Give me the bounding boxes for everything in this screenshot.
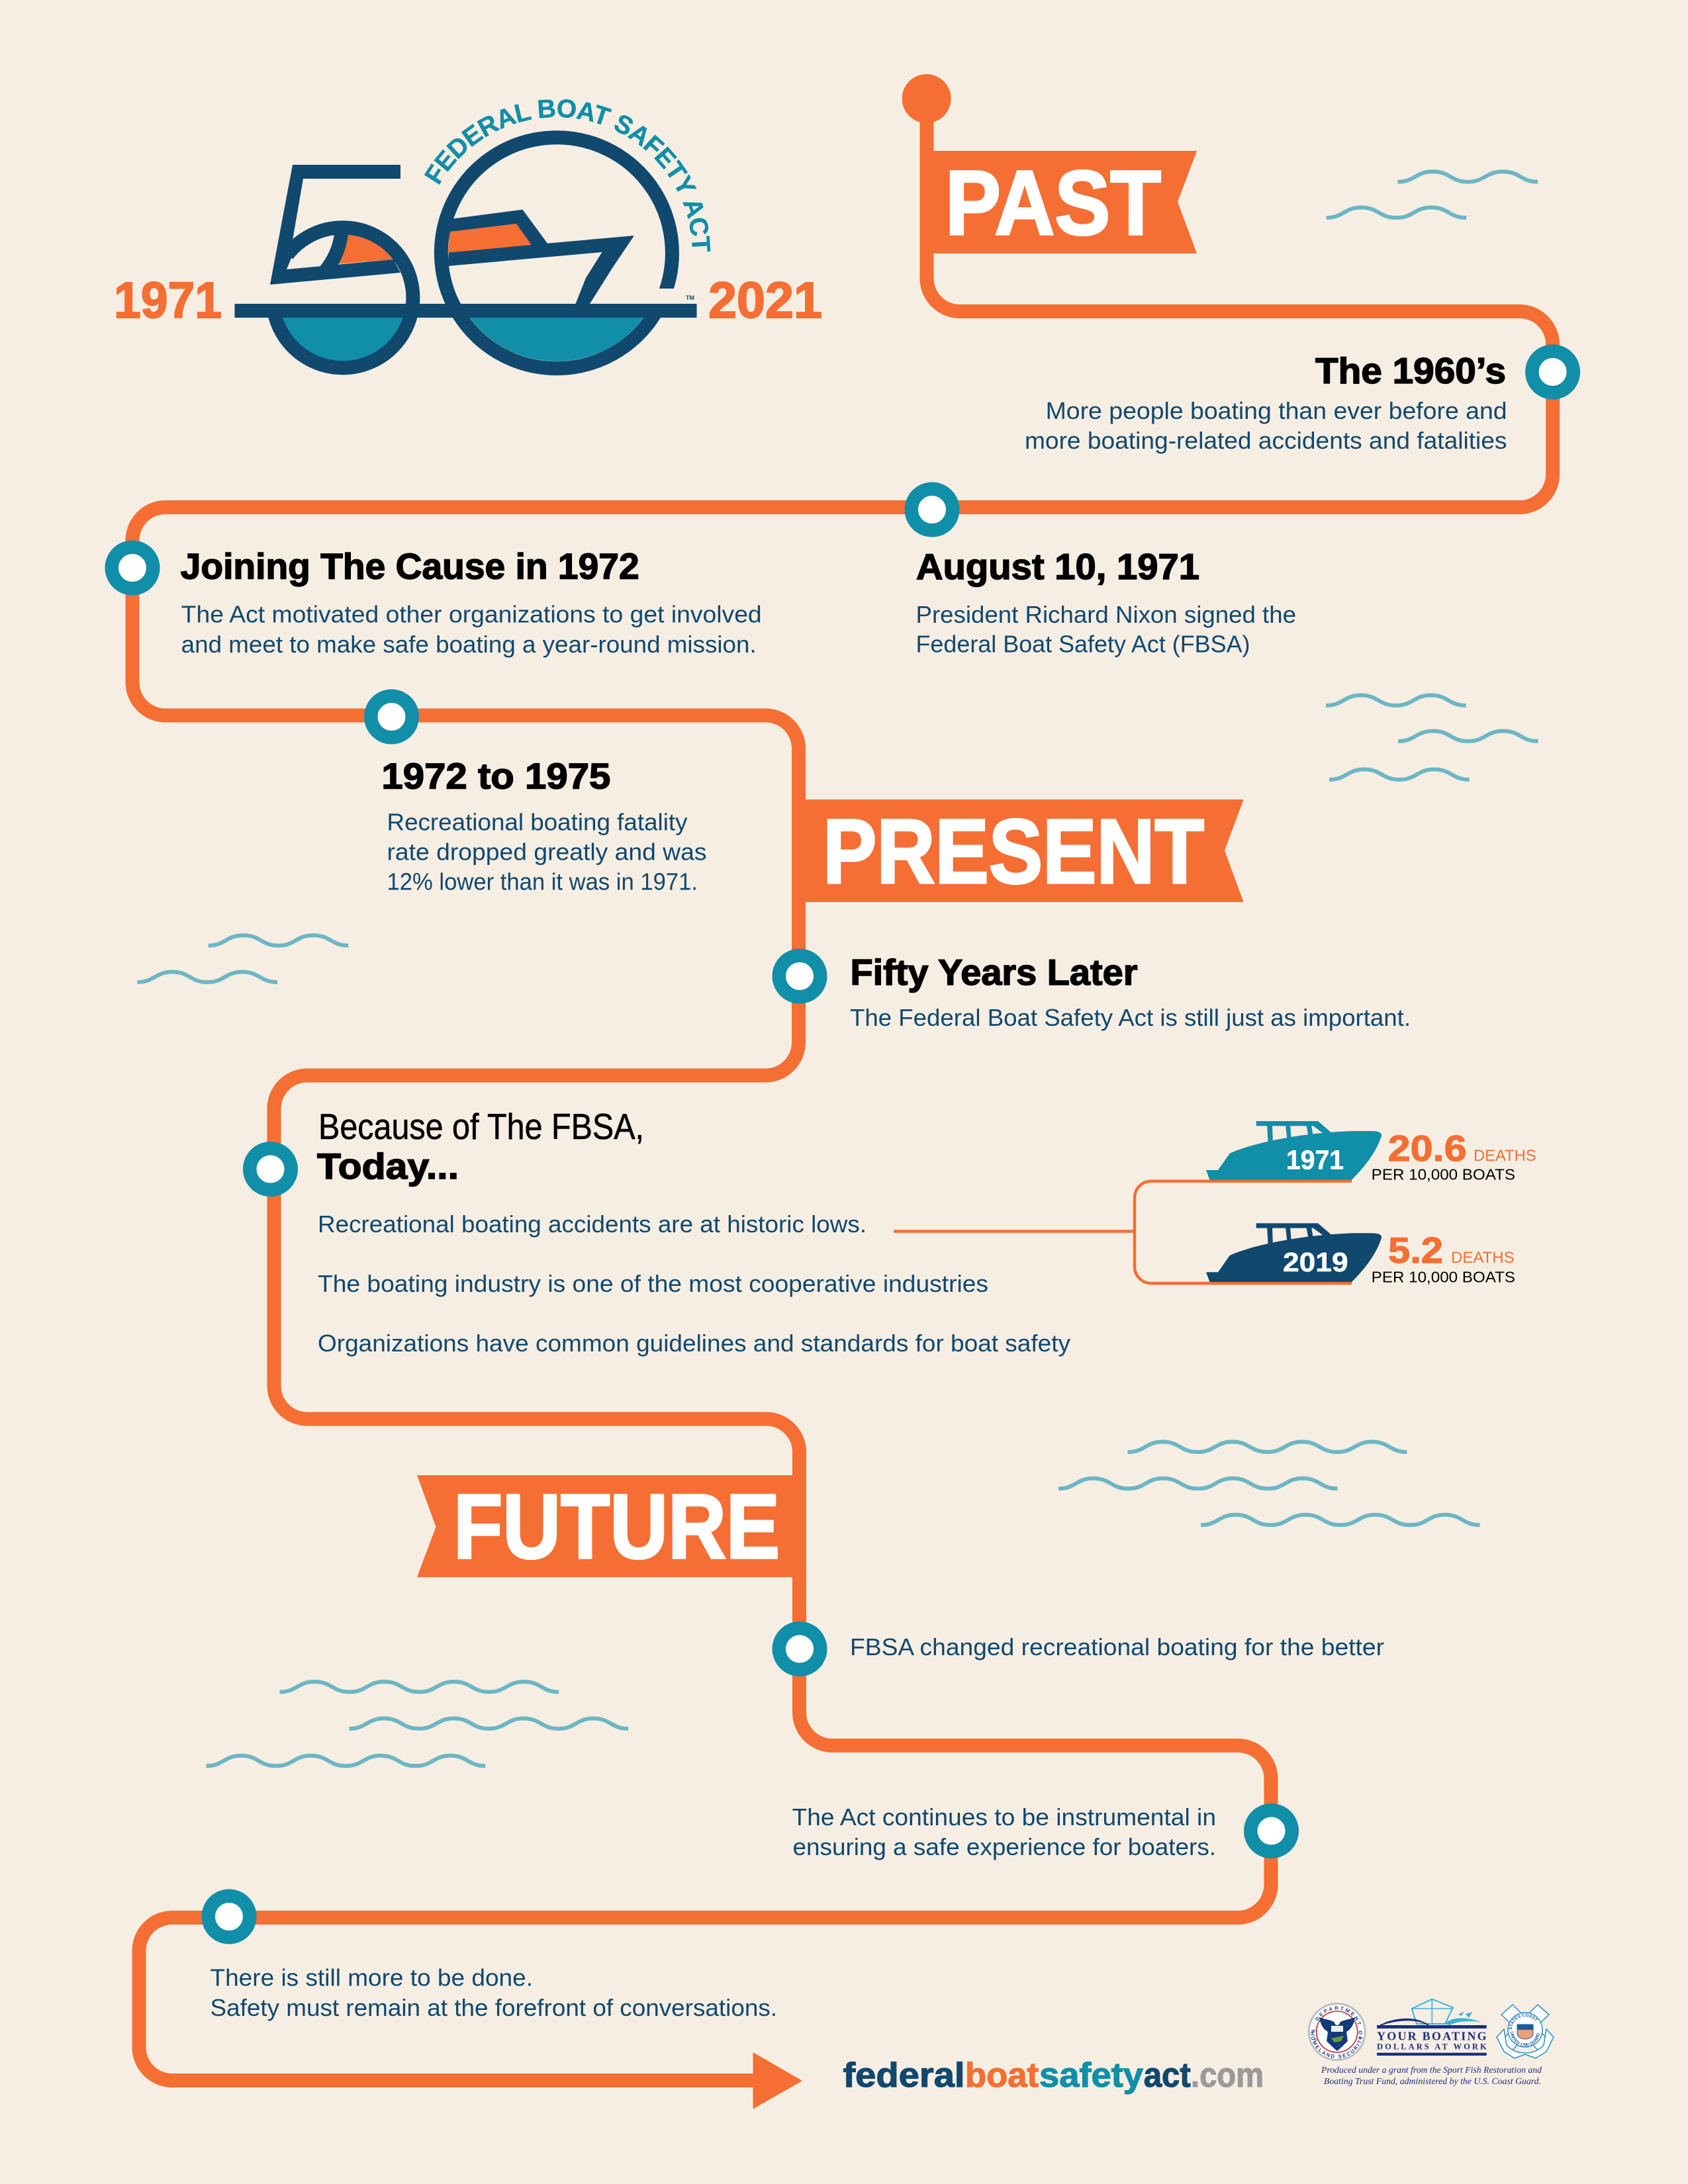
- website url: act: [1144, 2056, 1191, 2095]
- text block: Fifty Years Later: [850, 952, 1411, 1031]
- text block: August 10, 1971: Federal Boat Safety Act (FBSA): [916, 631, 1250, 658]
- text block: Fifty Years Later: The Federal Boat Safety Act is still just as important.: [850, 1004, 1411, 1031]
- text block: August 10, 1971: President Richard Nixon signed the: [916, 601, 1296, 628]
- text block: The Act continues: [792, 1803, 1216, 1860]
- text block: Because of The FBSA, Today: Organizations have common guidelines and standards for boat safety: [318, 1330, 1070, 1357]
- text block: Because of The FBSA, Today: [317, 1106, 1070, 1357]
- stat: 2019 boat: DEATHS: [1451, 1249, 1515, 1267]
- route line: [132, 99, 1553, 2081]
- logo start year: 1971: [114, 272, 222, 329]
- icon: Your Boating Dollars At Work logo: DOLLARS AT WORK: [1377, 2042, 1487, 2052]
- website url: [843, 2056, 1264, 2095]
- text block: Fifty Years Later: Fifty Years Later: [850, 952, 1137, 993]
- text block: Joining The Cause in 1972: Joining The Cause in 1972: [181, 545, 639, 586]
- text block: 1972 to 1975: Recreational boating fatality: [387, 809, 687, 835]
- logo: Federal Boat Safety Act 50 years: [114, 99, 822, 376]
- text block: Because of The FBSA, Today: The boating industry is one of the most cooperative industries: [318, 1270, 988, 1297]
- stat: 2019 boat: [1206, 1223, 1515, 1285]
- banner: PRESENT: PRESENT: [823, 801, 1204, 903]
- route start dot: [902, 74, 951, 123]
- text block: The 1960's: More people boating than ever before and: [1046, 397, 1507, 424]
- logo numeral zero with boat: [441, 138, 685, 369]
- boat icon 1971: [1206, 1121, 1382, 1180]
- stat: 1971 boat: DEATHS: [1474, 1147, 1536, 1165]
- icon: Your Boating Dollars At Work logo: [1377, 1999, 1487, 2056]
- text block: 1972 to 1975: 1972 to 1975: [381, 755, 610, 796]
- stat: 2019 boat: PER 10,000 BOATS: [1372, 1268, 1515, 1285]
- text block: August 10, 1971: August 10, 1971: [916, 546, 1199, 587]
- icon: Coast Guard emblem: [1496, 2004, 1554, 2059]
- text block: FBSA changed: FBSA changed recreational boating for the better: [850, 1633, 1384, 1661]
- boat icon 2019: [1206, 1223, 1382, 1282]
- connector bracket to stats: [894, 1181, 1352, 1283]
- website url: federal: [843, 2056, 965, 2095]
- text block: The 1960's: The 1960’s: [1315, 350, 1506, 391]
- text block: Because of The FBSA, Today: Because of The FBSA,: [318, 1106, 644, 1147]
- grant credit text: Produced under a grant from the Sport Fish Restoration and: [1321, 2066, 1542, 2075]
- text block: 1972 to 1975: 12% lower than it was in 1971.: [387, 868, 698, 895]
- stat: 1971 boat: 1971: [1286, 1145, 1344, 1175]
- grant credit text: [1321, 2066, 1542, 2087]
- text block: 1972 to 1975: rate dropped greatly and was: [387, 839, 707, 866]
- website url: boat: [965, 2056, 1039, 2095]
- logo trademark: TM: [686, 295, 694, 301]
- icon: Coast Guard emblem: STATES COAST: [1509, 2013, 1538, 2030]
- stat: 1971 boat: [1206, 1121, 1536, 1183]
- text block: The Act continues: The Act continues to be instrumental in: [792, 1803, 1216, 1831]
- grant credit text: Boating Trust Fund, administered by the U.S. Coast Guard.: [1324, 2077, 1541, 2087]
- text block: Joining The Cause in 1972: The Act motivated other organizations to get involved: [181, 601, 762, 628]
- icon: Your Boating Dollars At Work logo: YOUR BOATING: [1377, 2030, 1487, 2043]
- text block: Joining The Cause in 1972: [181, 545, 762, 658]
- text block: still more to be done: There is still more to be done.: [211, 1964, 533, 1991]
- text block: Because of The FBSA, Today: Recreational boating accidents are at historic lows.: [318, 1210, 867, 1238]
- route arrowhead: [753, 2052, 802, 2109]
- text block: The Act continues: ensuring a safe experience for boaters.: [793, 1833, 1216, 1860]
- logo curved title: FEDERAL BOAT SAFETY ACT: [424, 99, 711, 251]
- text block: 1972 to 1975: [381, 755, 707, 895]
- icon: Coast Guard emblem: UNITED 1790 GUARD: [1511, 2032, 1540, 2046]
- text block: still more to be done: Safety must remain at the forefront of conversations.: [211, 1994, 777, 2021]
- text block: August 10, 1971: [916, 546, 1296, 658]
- icon: Homeland Security seal: HOMELAND SECURITY: [1311, 2032, 1363, 2058]
- banner: PAST: PAST: [945, 152, 1161, 254]
- stat: 2019 boat: 5.2: [1388, 1230, 1443, 1271]
- stat: 1971 boat: PER 10,000 BOATS: [1372, 1166, 1515, 1183]
- text block: Because of The FBSA, Today: Today...: [317, 1146, 459, 1187]
- decorative waves: [137, 171, 1538, 1766]
- text block: still more to be done: [211, 1964, 777, 2021]
- logo end year: 2021: [708, 272, 822, 329]
- icon: Homeland Security seal: [1308, 2003, 1366, 2061]
- timeline nodes: [112, 351, 1573, 1937]
- stat: 2019 boat: 2019: [1283, 1247, 1348, 1277]
- text block: Joining The Cause in 1972: and meet to make safe boating a year-round mission.: [181, 631, 757, 658]
- logo horizon bar: [234, 304, 696, 318]
- text block: The 1960's: more boating-related accidents and fatalities: [1025, 427, 1507, 454]
- timeline route: [132, 74, 1553, 2109]
- icon: Homeland Security seal: U.S. DEPARTMENT OF: [1312, 2006, 1362, 2042]
- logo numeral five with small boat: [270, 165, 413, 368]
- website url: safety: [1039, 2056, 1143, 2095]
- text block: The 1960's: [1025, 350, 1507, 454]
- banner: FUTURE: FUTURE: [453, 1476, 780, 1578]
- logo water fills: [283, 318, 643, 361]
- stat: 1971 boat: 20.6: [1388, 1128, 1467, 1169]
- website url: .com: [1191, 2056, 1264, 2095]
